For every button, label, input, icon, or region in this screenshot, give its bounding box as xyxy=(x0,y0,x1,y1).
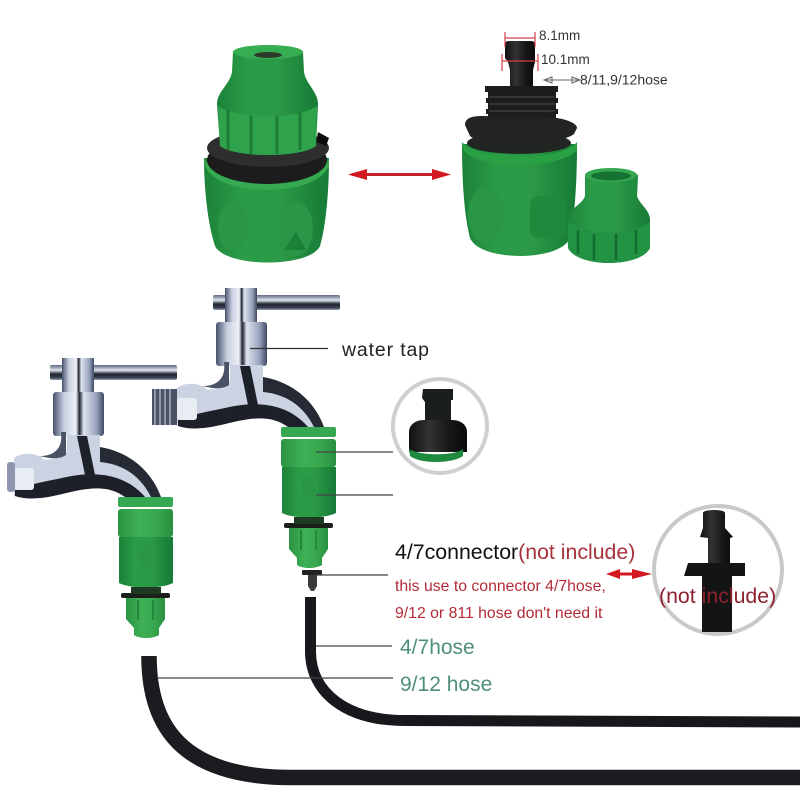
leader line: 4/7 hose xyxy=(316,645,392,647)
circle inset: 4/7 connector xyxy=(654,506,782,634)
connector body xyxy=(282,467,336,518)
connector lower nut xyxy=(289,528,328,568)
label: not include: (not include) xyxy=(659,584,776,608)
screw-on cap xyxy=(567,168,650,263)
label 10.1mm: 10.1mm xyxy=(541,52,590,67)
arrow to hose size xyxy=(544,77,580,83)
assembled quick connector xyxy=(204,45,329,262)
right water tap with connector xyxy=(152,288,340,568)
tap handle xyxy=(213,295,340,310)
label: 9/12 hose: 9/12 hose xyxy=(400,673,492,696)
note line 2: 9/12 or 811 hose don't need it xyxy=(395,605,603,622)
label 8.1mm: 8.1mm xyxy=(539,28,580,43)
circle inset: tap adapter xyxy=(393,379,487,473)
9/12 hose xyxy=(149,656,800,778)
4/7 hose xyxy=(310,597,800,722)
spout xyxy=(177,365,324,428)
left tap inlet end xyxy=(7,462,15,492)
label: 4/7 hose: 4/7hose xyxy=(400,636,475,659)
tap stem xyxy=(225,288,257,322)
label: water tap: water tap xyxy=(341,339,430,361)
leader line: 9/12 hose xyxy=(157,677,393,679)
connector ribbed ring xyxy=(281,439,336,467)
leader line: 4/7 connector xyxy=(317,574,388,576)
connector rubber ring xyxy=(284,523,333,528)
red double arrow between connector views xyxy=(348,169,451,180)
small red double arrow xyxy=(606,569,652,579)
label hose size: 8/11,9/12hose xyxy=(580,72,668,88)
note line 1: this use to connector 4/7hose, xyxy=(395,578,606,595)
small 4/7 connector fitted on right tap xyxy=(302,570,322,591)
tap body xyxy=(216,322,267,366)
leader lines: connector and adapter xyxy=(316,452,393,495)
heading: 4/7 connector not included: 4/7connector(not include) xyxy=(395,540,635,564)
left water tap with connector xyxy=(0,358,177,638)
connector collar xyxy=(281,427,336,437)
disassembled connector xyxy=(462,41,650,263)
dimension marks xyxy=(502,28,668,88)
threaded inlet xyxy=(152,389,178,425)
leader line: water tap xyxy=(250,348,328,350)
